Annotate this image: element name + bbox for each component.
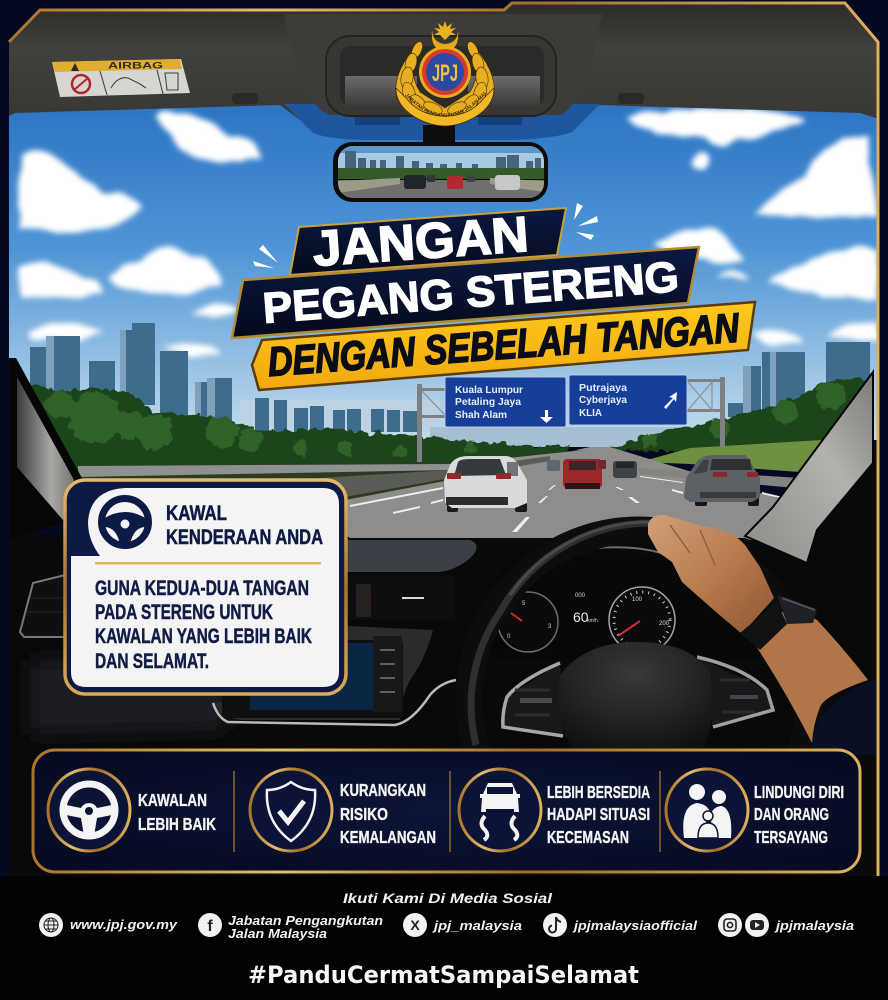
X [403,913,522,937]
digital speed readout: 000 [575,593,586,599]
gauge: speedometer: 200 [659,621,670,627]
car: dark hatch [613,461,637,478]
banner: DENGAN SEBELAH TANGAN: DENGAN SEBELAH TANGAN [266,304,742,385]
sky [9,95,879,440]
dashboard [9,448,878,876]
icon: skidding car [480,783,520,840]
callout body text: PADA STERENG UNTUK [95,601,273,624]
banner: JANGAN: JANGAN [311,206,530,277]
sign: Kuala Lumpur: Shah Alam [455,409,507,421]
JPJ roundel [419,46,471,98]
sign: Kuala Lumpur: Petaling Jaya [455,396,521,408]
rear-view mirror [333,142,548,202]
facebook: f [207,918,213,935]
car: grey SUV [684,455,760,506]
social media row [39,913,854,941]
trees [30,378,872,470]
frame left edge [8,42,10,876]
car: red [563,459,602,489]
benefits panel [33,750,860,872]
airbag hub [559,642,712,750]
icon: shield with check [267,782,315,841]
dome light [326,36,556,116]
mirror stem [423,125,455,145]
right spoke [697,657,773,727]
benefit: lindungi diri: TERSAYANG [754,827,828,847]
gauge: rev counter: 0 [507,634,511,640]
burst marks left [253,245,278,268]
sign: Putrajaya: KLIA [579,407,602,419]
callout heading [166,502,323,549]
icon: steering wheel [63,784,115,836]
gauge: speedometer [609,587,675,653]
star [434,21,456,40]
benefit: lindungi diri [666,769,844,851]
benefit: lebih bersedia: KECEMASAN [547,827,629,847]
facebook: Jalan Malaysia [228,926,327,941]
benefit: lebih bersedia [459,769,650,851]
gantry and road signs [417,375,725,462]
benefit: kawalan lebih baik: KAWALAN [138,790,207,810]
icon: steering wheel [102,498,148,546]
left spoke [503,663,563,736]
tiktok [543,913,697,937]
footer heading: Ikuti Kami Di Media Sosial [343,890,553,906]
benefit: kurangkan risiko kemalangan: RISIKO [340,804,388,824]
car: white SUV [444,456,527,512]
instagram and youtube: jpjmalaysia [774,918,854,933]
X: jpj_malaysia [432,918,522,933]
facebook: Jabatan Pengangkutan [228,913,383,928]
tiktok: jpjmalaysiaofficial [572,918,697,933]
digital speed readout: km/h [587,618,598,624]
sign: Putrajaya: Putrajaya [579,382,627,394]
infotainment screen [222,636,403,718]
JPJ roundel: JPJ [432,60,458,87]
benefit: kurangkan risiko kemalangan: KEMALANGAN [340,827,436,847]
steering wheel [468,516,776,748]
sleeve [812,680,878,755]
digital speed readout: 60 [573,609,589,625]
benefit: kawalan lebih baik [48,769,216,851]
gauge: speedometer: 100 [632,597,643,603]
wristwatch [740,595,817,650]
sign: Putrajaya: Cyberjaya [579,394,627,406]
side air vent [20,575,65,637]
benefit: kurangkan risiko kemalangan: KURANGKAN [340,780,426,800]
digital speed readout [574,592,598,622]
benefit: lebih bersedia: HADAPI SITUASI [547,804,650,824]
instrument cluster [498,546,676,653]
benefit: lindungi diri: LINDUNGI DIRI [754,782,844,802]
benefit: lebih bersedia: LEBIH BERSEDIA [547,782,650,802]
gauge: rev counter: 3 [548,624,552,630]
driver's arm and hand [648,515,878,755]
ribbon scroll [396,88,494,126]
wreath [396,40,494,126]
icon: family [683,784,731,838]
callout heading: KAWAL [166,502,227,525]
lane markings [350,476,783,532]
hand [648,515,774,634]
hashtag: #PanduCermatSampaiSelamat [248,961,639,989]
callout heading: KENDERAAN ANDA [166,526,323,549]
console trim [213,626,433,720]
centre air vent [356,584,424,617]
crescent [432,30,458,52]
benefit: lindungi diri: DAN ORANG [754,804,829,824]
city skyline [30,323,870,447]
cars on the road [444,455,760,512]
X: X [410,917,420,933]
callout body text [95,577,312,673]
headliner [0,0,888,145]
sign: Kuala Lumpur: Kuala Lumpur [455,384,523,396]
benefit: kurangkan risiko kemalangan [250,769,436,851]
forearm [752,605,868,743]
facebook [198,913,383,941]
callout: kawal kenderaan anda [65,480,346,694]
sign: Putrajaya [569,375,687,425]
instagram and youtube [718,913,854,937]
left A-pillar [9,358,82,540]
clouds [18,106,878,358]
headline [232,203,755,390]
callout body text: GUNA KEDUA-DUA TANGAN [95,577,309,600]
callout body text: KAWALAN YANG LEBIH BAIK [95,625,312,648]
JPJ emblem [395,21,495,126]
airbag warning sticker: AIRBAG [108,60,163,72]
callout body text: DAN SELAMAT. [95,650,209,673]
benefit: kawalan lebih baik: LEBIH BAIK [138,814,216,834]
banner: PEGANG STERENG: PEGANG STERENG [261,253,681,333]
visor clips [232,93,258,104]
sign: Kuala Lumpur [445,377,566,427]
gauge: rev counter: 5 [522,601,526,607]
airbag warning sticker [52,59,190,97]
right A-pillar [745,372,873,563]
grass slope [640,440,822,472]
road [330,447,800,540]
gauge: rev counter [498,592,558,652]
burst marks right [574,203,598,240]
website: www.jpj.gov.my [70,917,178,932]
website [39,913,178,937]
guardrails [78,451,800,497]
